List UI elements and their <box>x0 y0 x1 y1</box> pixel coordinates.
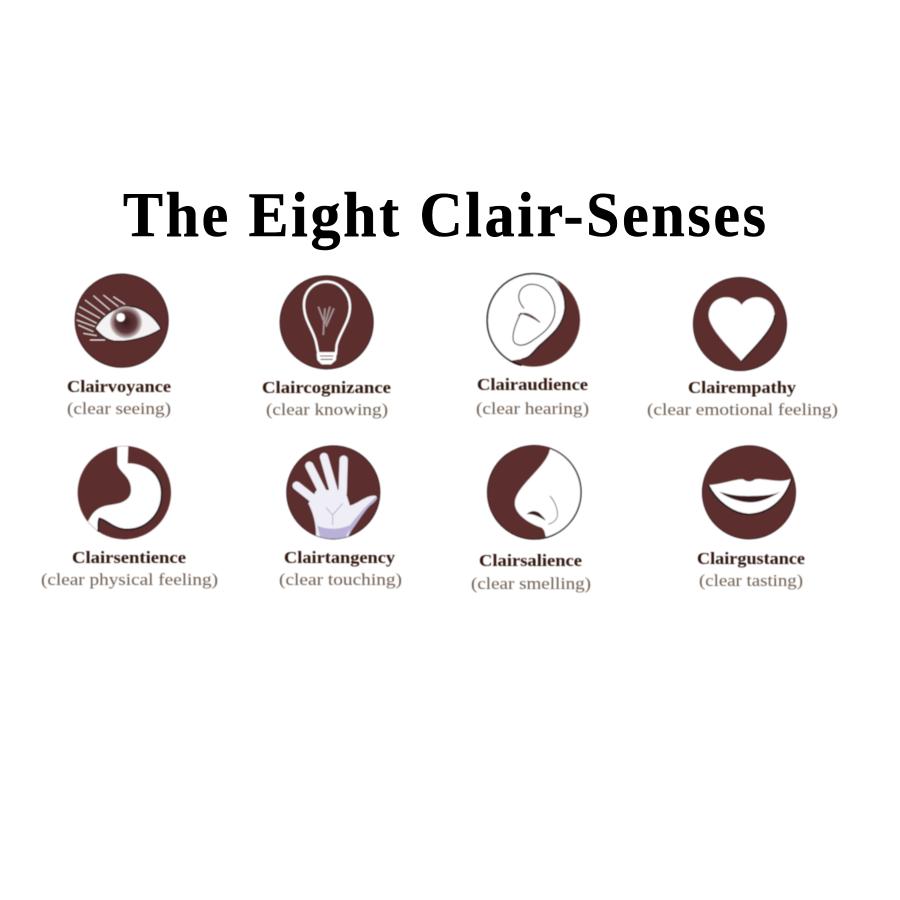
icon: nose <box>488 446 581 539</box>
panel: clairsentience <box>41 443 218 589</box>
label: Clairvoyance: Clairvoyance <box>67 377 171 396</box>
description: clear smelling: (clear smelling) <box>471 574 591 593</box>
panel: claircognizance <box>262 276 391 419</box>
description: clear seeing: (clear seeing) <box>67 399 171 418</box>
description: clear physical feeling: (clear physical feeling) <box>41 570 218 589</box>
icon: stomach <box>78 443 171 539</box>
icon: lips <box>702 446 796 539</box>
panel: clairgustance <box>697 446 805 590</box>
label: Clairaudience: Clairaudience <box>477 375 588 394</box>
description: clear touching: (clear touching) <box>279 570 402 589</box>
panel: clairaudience <box>476 268 589 418</box>
panel: clairempathy <box>647 277 838 419</box>
label: Clairgustance: Clairgustance <box>697 549 805 568</box>
description: clear tasting: (clear tasting) <box>699 571 803 590</box>
icon: ear <box>483 268 580 367</box>
description: clear hearing: (clear hearing) <box>476 399 589 418</box>
description: clear knowing: (clear knowing) <box>266 400 388 419</box>
icon: heart <box>693 277 787 371</box>
label: Clairtangency: Clairtangency <box>284 548 396 567</box>
label: Clairsentience: Clairsentience <box>72 548 186 567</box>
panel: clairvoyance <box>67 274 171 418</box>
icon: hand <box>287 446 380 539</box>
panel: clairtangency <box>279 446 402 589</box>
label: Clairempathy: Clairempathy <box>688 378 797 397</box>
panel: clairsalience <box>471 446 591 593</box>
icon: eye <box>75 274 168 367</box>
label: Clairsalience: Clairsalience <box>479 551 582 570</box>
title: The Eight Clair-Senses <box>123 180 766 250</box>
label: Claircognizance: Claircognizance <box>262 378 391 397</box>
icon: light bulb <box>280 276 373 369</box>
description: clear emotional feeling: (clear emotional feeling) <box>647 400 838 419</box>
